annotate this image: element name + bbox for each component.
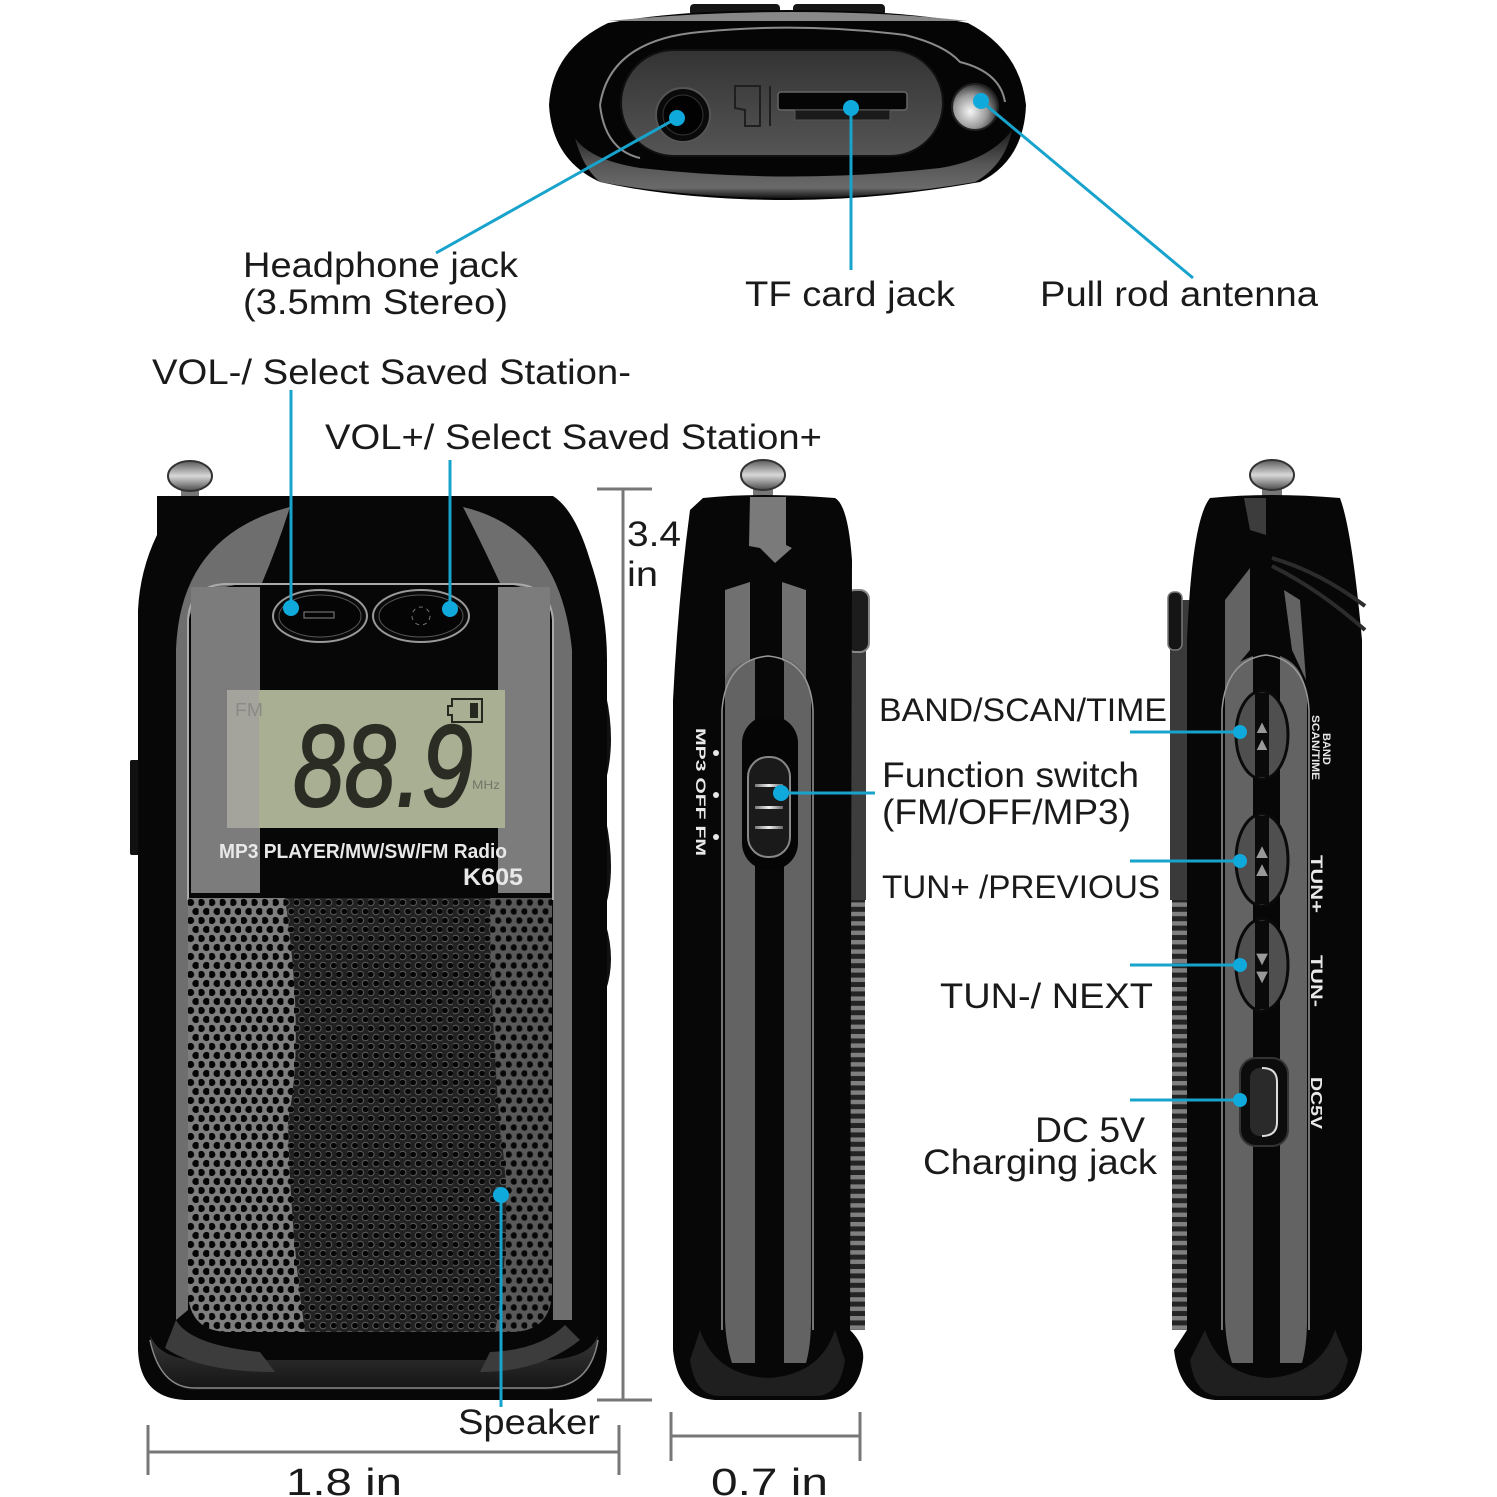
LCD MHz label: MHz [472, 778, 500, 792]
gloss bottom corners [165, 1320, 580, 1372]
label height [627, 515, 681, 594]
label height: 3.4 [627, 515, 681, 554]
main radio front view [130, 461, 611, 1400]
LCD FM label: FM [235, 700, 263, 720]
side one upper left gloss [725, 582, 750, 680]
label DC jack [923, 1111, 1158, 1182]
side one right gloss band [784, 658, 811, 1363]
side nubs [130, 695, 611, 990]
labels [152, 246, 1319, 1497]
button TUN minus: ▼ [1252, 948, 1272, 970]
side two left gloss band [1225, 656, 1253, 1363]
left side view [673, 460, 869, 1400]
label BAND: SCAN/TIME [1309, 715, 1321, 780]
button BAND [1236, 691, 1288, 779]
product description: MP3 PLAYER/MW/SW/FM Radio [219, 841, 507, 863]
label function switch [882, 756, 1139, 832]
label headphone jack [243, 246, 519, 322]
side two bottom plate [1190, 1330, 1348, 1396]
button volume down [273, 590, 367, 642]
switch slot [742, 716, 798, 870]
callout DC jack [1130, 1093, 1247, 1107]
side one panel outline [722, 656, 813, 1330]
callout speaker [493, 1187, 509, 1407]
card symbol [735, 86, 770, 126]
label headphone jack: (3.5mm Stereo) [243, 283, 508, 322]
callouts [283, 93, 1247, 1407]
label DC5V: DC5V [1307, 1077, 1324, 1129]
strap [1272, 558, 1365, 630]
label TUN minus: TUN- [1307, 955, 1326, 1007]
label antenna: Pull rod antenna [1040, 275, 1319, 314]
top view outline highlight [600, 28, 1005, 158]
side two raised strip [1168, 592, 1190, 900]
label VOL minus: VOL-/ Select Saved Station- [152, 353, 631, 392]
side one body [673, 495, 863, 1400]
callout BAND [1130, 725, 1247, 739]
button TUN plus [1236, 814, 1288, 906]
side one antenna [741, 460, 785, 498]
switch position dots [713, 750, 719, 840]
callout VOL plus [442, 460, 458, 617]
button TUN minus: ▼ [1252, 966, 1272, 988]
top view buttons [690, 4, 885, 16]
top view lower gloss band [575, 130, 1012, 198]
button BAND: ▲ [1253, 734, 1271, 754]
USB port [1240, 1058, 1288, 1146]
label function switch: Function switch [882, 756, 1139, 795]
callout antenna [973, 93, 1193, 278]
label height: in [627, 555, 658, 594]
callout headphone [436, 110, 685, 253]
callout TUN minus [1130, 958, 1247, 972]
callout function switch [773, 785, 875, 801]
side two panel outline [1222, 655, 1309, 1330]
side two right upper gloss [1284, 590, 1306, 680]
antenna tip [952, 84, 998, 130]
label function switch: (FM/OFF/MP3) [882, 793, 1131, 832]
gloss left [176, 507, 290, 1320]
switch knob [748, 757, 790, 857]
LCD frequency: 88.9 [293, 701, 473, 831]
label DC jack: DC 5V [1035, 1111, 1146, 1150]
callout VOL minus [283, 390, 299, 616]
label headphone jack: Headphone jack [243, 246, 519, 285]
switch label: MP3 OFF FM [693, 728, 709, 856]
side one upper right gloss [782, 582, 806, 680]
model name: K605 [463, 864, 523, 891]
dimension depth [671, 1412, 860, 1461]
side two right gloss band [1280, 656, 1307, 1363]
grille bright mesh left [188, 898, 305, 1332]
card slot [778, 92, 907, 120]
panel gloss left [191, 587, 260, 893]
side one raised strip [846, 590, 869, 900]
side two ribbed grille [1172, 900, 1189, 1330]
button TUN minus [1236, 919, 1288, 1011]
LCD screen [259, 690, 505, 828]
top view body [549, 10, 1026, 200]
top view gloss strip [608, 12, 968, 21]
label TF card: TF card jack [745, 275, 956, 314]
side one ribbed grille [848, 900, 865, 1330]
side one bottom plate [690, 1330, 845, 1396]
button TUN plus: ▲ [1252, 841, 1272, 863]
callout TUN plus [1130, 854, 1247, 868]
dimension height [597, 489, 652, 1400]
port recess [621, 50, 943, 156]
bottom outline [150, 1340, 598, 1388]
dimension width [148, 1425, 619, 1475]
side two body [1174, 495, 1362, 1400]
grille bright mesh right [490, 898, 552, 1332]
button TUN plus: ▲ [1252, 859, 1272, 881]
label BAND: BAND/SCAN/TIME [879, 692, 1167, 728]
speaker grille [188, 898, 552, 1332]
antenna knob [168, 461, 212, 499]
label VOL plus: VOL+/ Select Saved Station+ [325, 418, 822, 457]
side two antenna [1250, 460, 1294, 498]
LCD battery icon [448, 699, 482, 722]
button volume up [373, 590, 469, 642]
side two left upper gloss [1225, 568, 1250, 680]
gloss right [463, 507, 572, 1320]
button BAND: ▲ [1253, 717, 1271, 737]
side two upper glare [1244, 498, 1266, 535]
headphone socket [656, 88, 710, 142]
side one left gloss band [725, 658, 755, 1363]
label DC jack: Charging jack [923, 1143, 1158, 1182]
side one top glare [749, 497, 792, 563]
label BAND: BAND [1320, 733, 1332, 765]
label speaker: Speaker [458, 1403, 600, 1442]
label TUN minus: TUN-/ NEXT [940, 977, 1153, 1016]
panel gloss right [498, 587, 550, 893]
body [138, 496, 607, 1400]
label TUN plus: TUN+ /PREVIOUS [882, 869, 1160, 905]
front panel outline [188, 584, 553, 900]
callout TF card [843, 100, 859, 270]
right side view [1168, 460, 1365, 1400]
LCD glare extension [227, 690, 260, 828]
lower plate [150, 1335, 598, 1390]
top view of radio [549, 4, 1026, 200]
label TUN plus: TUN+ [1307, 855, 1326, 913]
grille dark mesh [188, 898, 552, 1332]
